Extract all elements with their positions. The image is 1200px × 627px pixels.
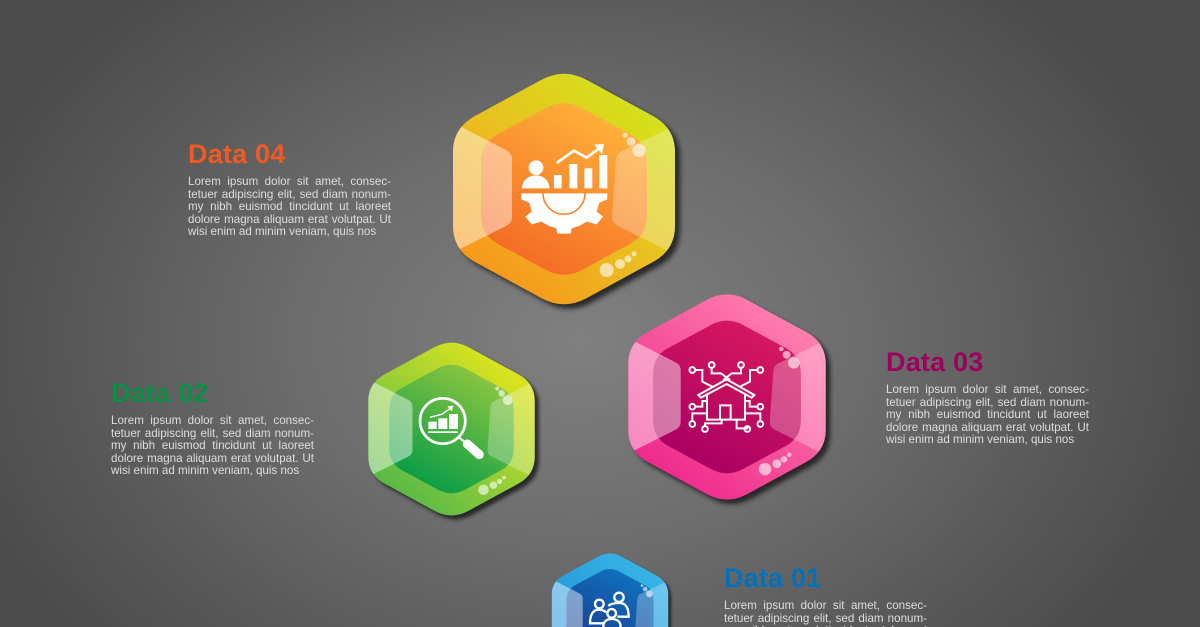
heading: Data 02: Data 02 xyxy=(111,378,208,408)
icon: smart home circuit xyxy=(689,362,763,432)
hexagon: Data 03 pink xyxy=(620,294,834,504)
hexagon diagram xyxy=(368,74,833,627)
hexagon body green xyxy=(362,343,542,515)
paragraph: Data 03: dolore magna aliquam erat volutpat. Ut xyxy=(886,421,1089,434)
paragraph: Data 01: tetuer adipiscing elit, sed diam nonum- xyxy=(724,612,927,625)
hexagon: Data 02 green xyxy=(362,343,542,519)
icon: person, growth chart and gear xyxy=(521,144,607,234)
paragraph: Data 04: dolore magna aliquam erat volutpat. Ut xyxy=(188,213,391,226)
paragraph: Data 03: tetuer adipiscing elit, sed diam nonum- xyxy=(886,396,1089,409)
text block: Data 01 xyxy=(724,563,927,627)
text block: Data 04 xyxy=(188,139,391,238)
paragraph: Data 02: wisi enim ad minim veniam, quis nos xyxy=(111,464,299,477)
paragraph: Data 04 xyxy=(188,176,391,238)
paragraph: Data 03 xyxy=(886,384,1089,446)
hexagon: Data 04 orange xyxy=(444,74,684,309)
heading: Data 04: Data 04 xyxy=(188,139,285,169)
paragraph: Data 03: my nibh euismod tincidunt ut laoreet xyxy=(886,408,1089,421)
paragraph: Data 02: dolore magna aliquam erat volutpat. Ut xyxy=(111,452,314,465)
icon: magnifying glass over chart xyxy=(420,398,479,455)
hexagon body orange xyxy=(444,74,684,304)
paragraph: Data 04: wisi enim ad minim veniam, quis nos xyxy=(188,225,376,238)
paragraph: Data 03: wisi enim ad minim veniam, quis nos xyxy=(886,433,1074,446)
heading: Data 03: Data 03 xyxy=(886,347,983,377)
paragraph: Data 04: tetuer adipiscing elit, sed diam nonum- xyxy=(188,188,391,201)
paragraph: Data 04: my nibh euismod tincidunt ut laoreet xyxy=(188,200,391,213)
hexagon body blue xyxy=(547,553,673,627)
hexagon: Data 01 blue xyxy=(547,553,673,627)
text block: Data 02 xyxy=(111,378,314,477)
icon: group of people xyxy=(590,593,629,627)
paragraph: Data 02: tetuer adipiscing elit, sed diam nonum- xyxy=(111,427,314,440)
paragraph: Data 02: my nibh euismod tincidunt ut laoreet xyxy=(111,439,314,452)
paragraph: Data 01 xyxy=(724,600,927,627)
hexagon body pink xyxy=(620,294,834,500)
text block: Data 03 xyxy=(886,347,1089,446)
heading: Data 01: Data 01 xyxy=(724,563,821,593)
paragraph: Data 02 xyxy=(111,415,314,477)
